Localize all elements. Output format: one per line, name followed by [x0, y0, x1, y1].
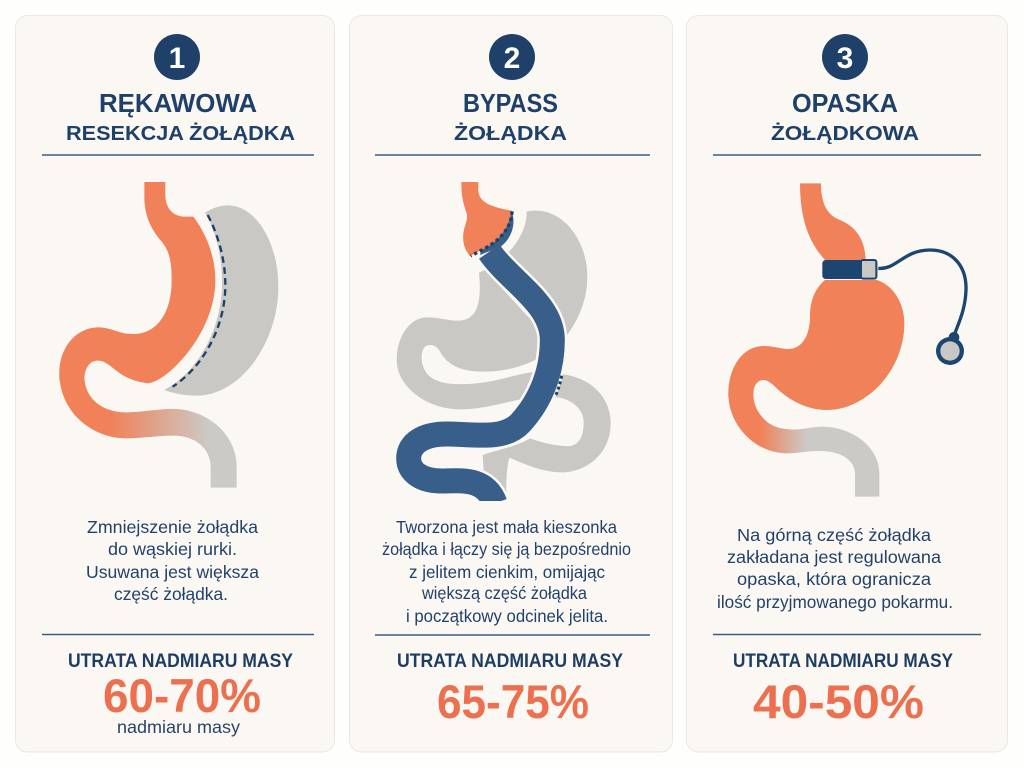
description: żołądka i łączy się ją bezpośrednio [382, 539, 631, 559]
description: do wąskiej rurki. [108, 539, 237, 559]
description: część żołądka. [114, 584, 228, 604]
cut line [173, 215, 225, 387]
stat: excess weight loss: UTRATA NADMIARU MASY [397, 651, 623, 672]
heading: gastric bypass: ŻOŁĄDKA [454, 122, 567, 145]
panel: sleeve gastrectomy [16, 16, 334, 752]
panel: gastric bypass [350, 16, 672, 752]
remaining sleeve stomach [59, 182, 215, 383]
description: Tworzona jest mała kieszonka [396, 517, 617, 537]
stat: excess weight loss: 40-50% [753, 675, 924, 728]
heading: gastric bypass: BYPASS [463, 90, 558, 118]
stat: excess weight loss: nadmiaru masy [117, 717, 240, 737]
stat: excess weight loss [733, 651, 953, 728]
heading: gastric band: OPASKA [792, 90, 898, 118]
description: zakładana jest regulowana [727, 547, 941, 567]
bypassed intestine [483, 374, 611, 500]
rerouted blue intestine [409, 252, 552, 503]
staple line, anastomosis [555, 376, 562, 396]
heading: gastric band: ŻOŁĄDKOWA [771, 122, 919, 145]
description: z jelitem cienkim, omijając [409, 562, 605, 582]
heading: gastric band [771, 90, 919, 145]
number badge 3 [822, 34, 868, 80]
description [86, 517, 259, 604]
number badge 3: 3 [837, 42, 853, 75]
stat: excess weight loss: 60-70% [103, 669, 261, 722]
stat: excess weight loss: UTRATA NADMIARU MASY [68, 651, 293, 672]
illustration: bypass [397, 182, 611, 503]
port [936, 332, 964, 365]
number badge 1 [154, 34, 200, 80]
description: opaska, która ogranicza [737, 569, 931, 589]
heading: sleeve gastrectomy: RESEKCJA ŻOŁĄDKA [66, 122, 295, 145]
tubing [878, 250, 966, 335]
illustration: sleeve stomach [59, 182, 278, 488]
staple line, pouch [471, 211, 512, 256]
intestine fading to grey [728, 390, 879, 497]
illustration: band [728, 183, 966, 497]
stat: excess weight loss: UTRATA NADMIARU MASY [733, 651, 953, 672]
small stomach pouch [461, 182, 512, 256]
white halo [484, 252, 567, 500]
number badge 2 [489, 34, 535, 80]
heading: sleeve gastrectomy [66, 90, 295, 145]
band buckle [861, 260, 876, 279]
description: Na górną część żołądka [737, 525, 931, 545]
description: większą część żołądka [421, 583, 587, 603]
description: ilość przyjmowanego pokarmu. [717, 592, 953, 612]
number badge 1: 1 [169, 42, 185, 75]
heading: sleeve gastrectomy: RĘKAWOWA [99, 90, 257, 118]
heading: gastric bypass [454, 90, 567, 145]
intestine fading to grey [59, 373, 237, 488]
stat: excess weight loss [397, 651, 623, 728]
upper stomach [800, 183, 866, 260]
description: i początkowy odcinek jelita. [406, 606, 608, 626]
stat: excess weight loss [68, 651, 293, 737]
description: Zmniejszenie żołądka [87, 517, 258, 537]
lower stomach [728, 280, 904, 410]
description [717, 525, 953, 612]
number badge 2: 2 [504, 42, 520, 75]
connection band [480, 211, 513, 255]
removed stomach part [164, 205, 278, 396]
band [822, 260, 877, 279]
description [382, 517, 631, 626]
stat: excess weight loss: 65-75% [437, 675, 589, 728]
bypassed stomach, lower [397, 270, 547, 409]
panel: gastric band [686, 16, 1008, 752]
description: Usuwana jest większa [86, 562, 259, 582]
bypassed stomach, upper [508, 211, 587, 336]
